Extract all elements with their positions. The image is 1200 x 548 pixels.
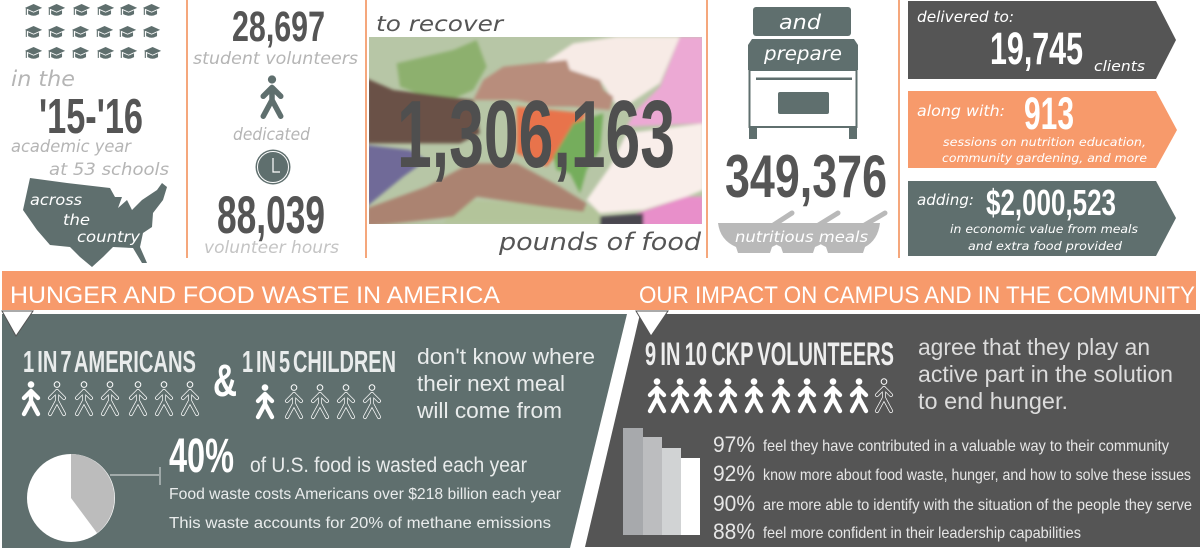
pictogram: 1 of 5 people	[258, 384, 379, 417]
panel: pounds of food recovered	[367, 12, 703, 256]
panel: nutrition education sessions	[908, 88, 1177, 168]
text: academic year: academic year	[11, 137, 132, 157]
text: at 53 schools: at 53 schools	[49, 160, 169, 180]
stat: volunteer hours count: 88,039	[217, 186, 325, 245]
text: survey results: 92%	[713, 461, 755, 486]
label: student volunteers: student volunteers	[193, 49, 358, 69]
panel: hunger and food waste	[2, 311, 627, 548]
icon: rows of graduation caps	[25, 4, 161, 59]
chart: descending bars	[623, 428, 700, 535]
text: survey results: feel more confident in their leadership capabilities	[763, 525, 1081, 542]
panel: impact on campus	[585, 311, 1200, 547]
text: pounds of food: pounds of food	[498, 228, 702, 256]
panel: clients delivered to: 19,745	[990, 23, 1083, 74]
panel: economic value: $2,000,523	[986, 182, 1116, 223]
text: agree statement: active part in the solution	[918, 361, 1173, 387]
panel: economic value: adding:	[917, 191, 974, 209]
text: across the country: across	[30, 191, 82, 209]
icon: bowls with spoons: nutritious meals	[735, 228, 868, 246]
label: dedicated: dedicated	[233, 125, 310, 145]
panel: academic year and schools	[11, 4, 169, 267]
label: volunteer hours: volunteer hours	[204, 238, 339, 258]
panel: clients delivered to: clients	[1094, 59, 1145, 75]
panel: nutrition education sessions: sessions on nutrition education,	[943, 135, 1146, 149]
icon: bowls with spoons	[718, 213, 885, 253]
icon: map of the United States	[23, 178, 167, 267]
panel: clients delivered to	[908, 1, 1176, 79]
stat: 1 in 5 children: 1 IN 5 CHILDREN	[242, 344, 396, 379]
text: survey results: 88%	[713, 519, 755, 544]
text: survey results: feel they have contributed in a valuable way to their community	[763, 438, 1169, 455]
panel: volunteers and hours	[193, 3, 358, 258]
panel: nutrition education sessions: 913	[1024, 88, 1074, 139]
text: survey results: 90%	[713, 491, 755, 516]
banner: section headings	[2, 271, 1196, 310]
symbol: ampersand: &	[213, 355, 237, 406]
text: survey results: 97%	[713, 432, 755, 457]
text: food waste facts: Food waste costs Americans over $218 billion each year	[169, 486, 561, 503]
icon: clock	[256, 150, 290, 184]
text: survey results	[713, 432, 1192, 544]
text: in the: in the	[11, 67, 75, 91]
text: across the country: the	[63, 211, 90, 229]
icon: oven with text: prepare	[763, 43, 842, 65]
stat: 9 in 10 volunteers: 9 IN 10 CKP VOLUNTEERS	[645, 336, 894, 372]
panel: economic value	[908, 181, 1176, 256]
panel: economic value: in economic value from meals	[950, 222, 1138, 236]
heading: hunger and food waste: HUNGER AND FOOD WASTE IN AMERICA	[10, 282, 500, 309]
panel: nutrition education sessions: along with:	[917, 102, 1005, 120]
stat: pounds of food count: 1,306,163	[397, 81, 675, 188]
text: across the country	[30, 191, 141, 246]
photo: hands holding vegetables	[367, 37, 703, 227]
text: agree statement: to end hunger.	[918, 388, 1068, 414]
text: agree statement: agree that they play an	[918, 334, 1150, 360]
panel: nutrition education sessions: community gardening, and more	[942, 151, 1147, 165]
icon: oven with text	[748, 7, 858, 139]
icon: oven with text: and	[779, 10, 821, 34]
stat: 1 in 7 Americans: 1 IN 7 AMERICANS	[23, 344, 196, 379]
text: food waste facts: of U.S. food is wasted each year	[250, 454, 527, 477]
text: to recover: to recover	[376, 12, 505, 36]
text: next meal statement: will come from	[416, 398, 562, 423]
text: next meal statement: don't know where	[417, 344, 595, 369]
text: year range: '15-'16	[39, 90, 143, 144]
text: next meal statement	[416, 344, 595, 423]
stat: student volunteer count: 28,697	[232, 3, 325, 51]
panel: meals prepared	[718, 7, 887, 253]
text: food waste facts: This waste accounts for 20% of methane emissions	[169, 515, 551, 532]
pictogram: 9 of 10 people	[650, 378, 891, 411]
text: agree statement	[918, 334, 1173, 414]
text: next meal statement: their next meal	[417, 371, 565, 396]
panel: clients delivered to: delivered to:	[917, 8, 1014, 26]
stat: meals count: 349,376	[725, 143, 887, 210]
icon: pointer triangle	[636, 311, 668, 336]
text: across the country: country	[77, 228, 141, 246]
stat: 40 percent: 40%	[169, 430, 234, 483]
icon: pointer triangle	[2, 311, 33, 336]
icon: walking person	[263, 75, 281, 116]
chart: pie of wasted food	[27, 454, 160, 542]
text: food waste facts	[169, 454, 561, 532]
pictogram: 1 of 7 people	[24, 381, 197, 414]
panel: economic value: and extra food provided	[968, 239, 1123, 253]
